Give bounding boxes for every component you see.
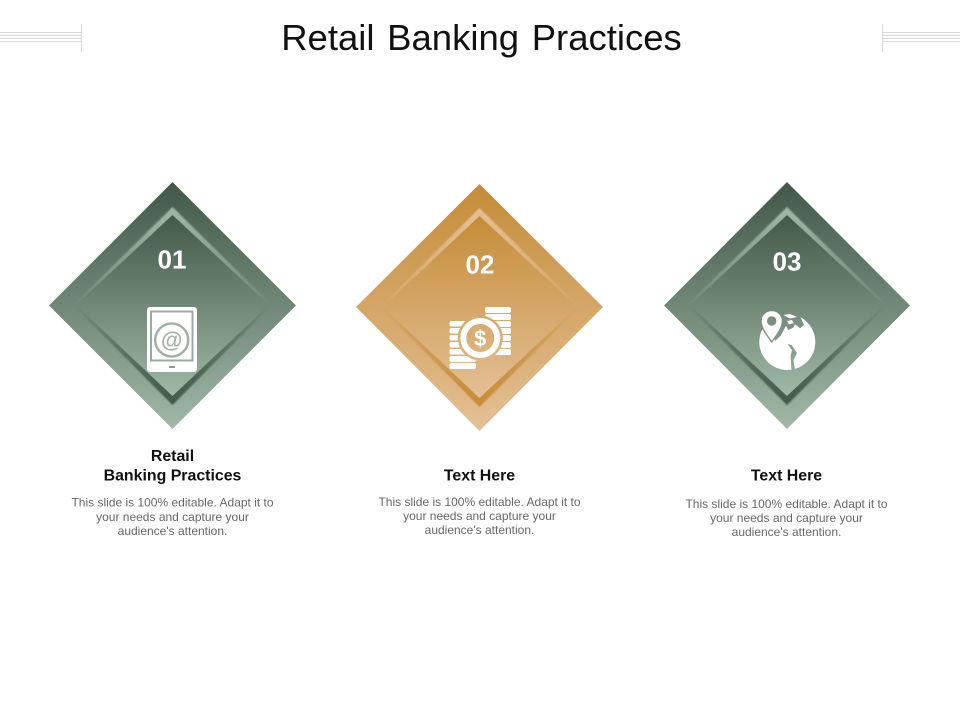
text block: step 01 — [71, 448, 274, 538]
diamond: ring 01 — [73, 207, 272, 405]
panel: step 03 — [664, 182, 910, 429]
text block: step 03: your needs and capture your — [710, 511, 863, 525]
text block: step 02: This slide is 100% editable. Adapt it to — [378, 495, 581, 509]
text block: step 01: your needs and capture your — [96, 510, 249, 524]
panel: step 02 — [356, 184, 603, 431]
number 02: 02 — [466, 250, 494, 280]
text block: step 01: audience's attention. — [118, 524, 227, 538]
text block: step 03: audience's attention. — [732, 525, 841, 539]
number 01: 01 — [158, 244, 186, 274]
text block: step 01: This slide is 100% editable. Adapt it to — [71, 496, 274, 510]
icon: coin stacks: $ — [474, 326, 486, 351]
panel: step 01 — [49, 182, 296, 429]
decoration: right header lines — [882, 24, 960, 52]
text block: step 02: audience's attention. — [425, 523, 534, 537]
diamond: outer 02 — [356, 184, 603, 431]
text block: step 02: Text Here — [444, 468, 515, 484]
text block: step 01: Retail — [151, 448, 194, 465]
number 03: 03 — [773, 246, 801, 276]
text block: step 02: your needs and capture your — [403, 509, 556, 523]
diamond: outer 01 — [49, 182, 296, 429]
text block: step 03: This slide is 100% editable. Adapt it to — [685, 497, 888, 511]
diamond: face 01 — [76, 215, 269, 396]
icon: globe with pin — [759, 310, 815, 370]
text block: step 03: Text Here — [751, 468, 822, 484]
diamond: face 03 — [690, 215, 884, 396]
title: Retail Banking Practices — [281, 17, 682, 58]
icon: coin stacks — [450, 307, 511, 369]
icon: tablet with at sign — [147, 307, 197, 372]
diamond: ring 03 — [687, 207, 887, 405]
icon: tablet with at sign: @ — [161, 328, 182, 352]
diamond: ring 02 — [380, 208, 580, 407]
text block: step 03 — [685, 468, 888, 539]
diamond: face 02 — [383, 216, 577, 398]
text block: step 01: Banking Practices — [104, 468, 242, 484]
diamond: outer 03 — [664, 182, 910, 429]
text block: step 02 — [378, 468, 581, 537]
decoration: left header lines — [0, 24, 82, 52]
